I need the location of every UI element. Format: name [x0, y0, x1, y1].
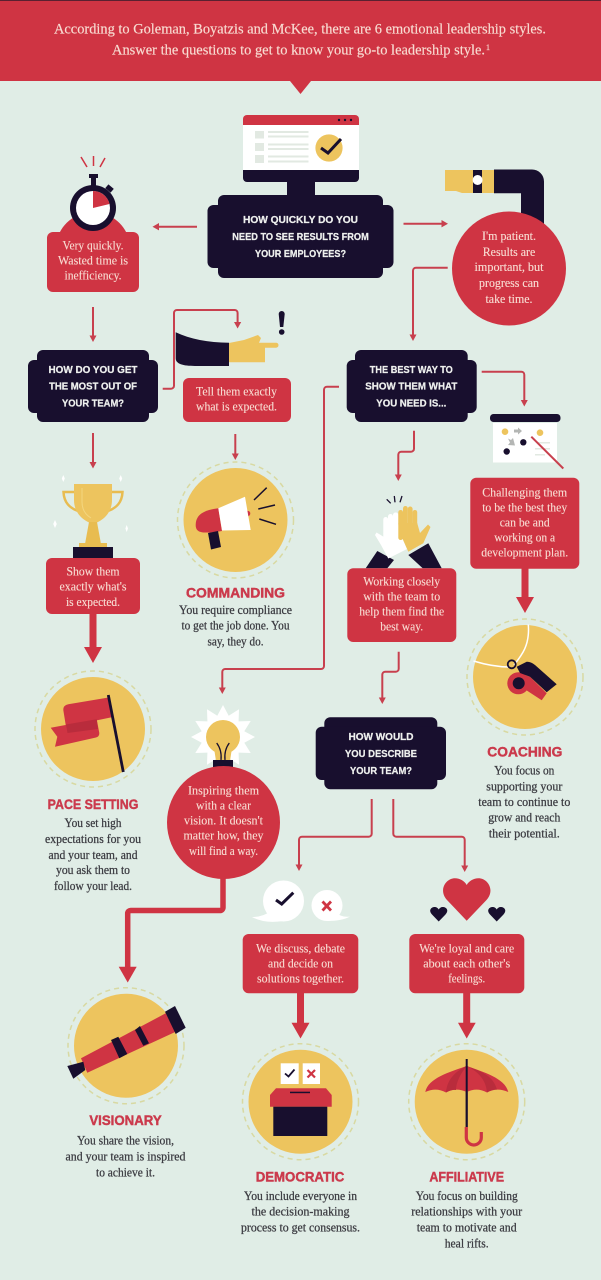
- answer box: working closely: help them find the: [359, 604, 445, 618]
- answer circle: inspiring: will find a way.: [189, 844, 258, 858]
- question: best way: YOU NEED IS...: [376, 399, 446, 410]
- answer box: challenging: development plan.: [481, 546, 568, 560]
- icon: arm with wristwatch: [445, 170, 544, 240]
- answer box: we're loyal: about each other's: [423, 956, 510, 970]
- answer circle: inspiring: [167, 766, 280, 879]
- question: describe team: [316, 717, 446, 789]
- text: pace setting: expectations for you: [45, 832, 141, 846]
- icon: hearts: [430, 878, 505, 922]
- answer circle: inspiring: with a clear: [196, 799, 251, 813]
- answer box: challenging: [470, 478, 579, 569]
- answer circle: inspiring: Inspiring them: [188, 784, 259, 798]
- arrow: best way to whiteboard: [482, 372, 528, 406]
- text: affiliative: team to motivate and: [417, 1221, 517, 1235]
- text: commanding: [179, 584, 293, 649]
- answer box: show them: [46, 558, 140, 614]
- text: democratic: the decision-making: [252, 1205, 350, 1219]
- question: how quickly: YOUR EMPLOYEES?: [255, 249, 346, 260]
- answer circle: patient: take time.: [486, 292, 532, 306]
- arrow: loyal to affiliative: [458, 992, 476, 1038]
- icon: stopwatch: [81, 156, 114, 193]
- answer box: tell them: Tell them exactly: [196, 385, 278, 399]
- question: how quickly: NEED TO SEE RESULTS FROM: [232, 232, 369, 243]
- text: coaching: team to continue to: [478, 795, 570, 809]
- arrow: patient to best way: [410, 268, 448, 341]
- answer box: show them: is expected.: [66, 595, 120, 609]
- answer circle: patient: important, but: [474, 260, 544, 274]
- arrow: describe team to discuss: [296, 799, 372, 871]
- question: best way: [347, 350, 477, 422]
- text: visionary: and your team is inspired: [66, 1149, 186, 1163]
- question: best way: SHOW THEM WHAT: [365, 382, 458, 393]
- icon: affiliative umbrella: [409, 1044, 525, 1160]
- text: visionary: [66, 1112, 186, 1179]
- arrow: very quickly to how do you get: [90, 307, 96, 342]
- text: visionary: VISIONARY: [89, 1112, 162, 1128]
- arrow: show them to pace setting: [84, 613, 102, 663]
- intro text: [54, 22, 546, 58]
- text: commanding: say, they do.: [208, 635, 264, 649]
- icon: pointing hand: [176, 332, 278, 366]
- text: democratic: process to get consensus.: [241, 1221, 360, 1235]
- icon: trophy: [53, 475, 128, 558]
- icon: visionary telescope: [67, 988, 186, 1104]
- answer circle: patient: I'm patient.: [482, 229, 536, 243]
- answer box: show them: Show them: [66, 565, 120, 579]
- text: visionary: to achieve it.: [96, 1165, 155, 1179]
- icon: high five: [366, 496, 442, 568]
- text: coaching: grow and reach: [488, 811, 560, 825]
- question: describe team: YOU DESCRIBE: [345, 749, 417, 760]
- icon: democratic ballot box: [242, 1044, 358, 1160]
- question: describe team: HOW WOULD: [348, 732, 414, 743]
- text: affiliative: You focus on building: [416, 1189, 518, 1203]
- text: democratic: [241, 1169, 360, 1235]
- answer box: very quickly: Wasted time is: [58, 254, 128, 268]
- icon: whiteboard: [490, 414, 563, 468]
- text: democratic: DEMOCRATIC: [256, 1169, 344, 1185]
- answer circle: patient: Results are: [483, 245, 536, 259]
- icon: computer monitor with check: [243, 115, 359, 197]
- text: democratic: You include everyone in: [244, 1189, 357, 1203]
- icon: speech bubbles: [252, 880, 350, 922]
- answer box: we're loyal: We're loyal and care: [419, 941, 515, 955]
- arrow: how do you get to tell them: [163, 310, 241, 389]
- intro text: According to Goleman, Boyatzis and McKee, there are 6 emotional leadership styles.: [54, 22, 546, 38]
- answer circle: patient: progress can: [479, 276, 539, 290]
- text: affiliative: relationships with your: [411, 1205, 522, 1219]
- arrow: to very quickly: [152, 223, 197, 230]
- answer box: challenging: Challenging them: [482, 486, 568, 500]
- icon: commanding megaphone: [178, 462, 294, 578]
- answer box: show them: exactly what's: [60, 580, 127, 594]
- icon: coaching whistle: [467, 619, 583, 735]
- question: how do you get: [28, 350, 158, 422]
- answer box: working closely: with the team to: [363, 589, 440, 603]
- text: affiliative: AFFILIATIVE: [429, 1169, 504, 1185]
- text: pace setting: you ask them to: [56, 863, 130, 877]
- arrow: inspiring to visionary: [119, 877, 223, 982]
- answer box: challenging: to be the best they: [482, 501, 568, 515]
- question: how do you get: HOW DO YOU GET: [48, 365, 138, 376]
- answer box: very quickly: Very quickly.: [62, 238, 124, 252]
- text: affiliative: [411, 1169, 522, 1250]
- arrow: tell them to commanding: [232, 434, 239, 460]
- intro text: 1: [486, 43, 490, 52]
- text: pace setting: [45, 796, 141, 893]
- question: describe team: YOUR TEAM?: [350, 766, 412, 777]
- icon: light bulb: [191, 705, 255, 769]
- arrow: describe team to loyal: [393, 799, 468, 872]
- answer circle: patient: [452, 212, 566, 326]
- answer circle: inspiring: vision. It doesn't: [184, 814, 264, 828]
- arrow: how do you get to trophy: [90, 433, 96, 468]
- answer box: very quickly: inefficiency.: [64, 268, 122, 282]
- text: pace setting: and your team, and: [48, 848, 138, 862]
- arrow: best way to high five: [395, 431, 414, 481]
- arrow: working closely to describe team: [379, 652, 399, 704]
- answer box: challenging: working on a: [494, 531, 556, 545]
- text: coaching: [478, 744, 570, 840]
- icon: exclamation mark: [279, 311, 285, 335]
- answer box: we're loyal: feelings.: [448, 971, 485, 985]
- question: how do you get: YOUR TEAM?: [62, 399, 124, 410]
- text: commanding: You require compliance: [179, 603, 293, 617]
- arrow: to patient: [404, 220, 448, 227]
- arrow: discuss to democratic: [292, 992, 310, 1038]
- text: commanding: COMMANDING: [186, 584, 285, 600]
- answer box: working closely: best way.: [380, 620, 423, 634]
- answer box: challenging: can be and: [500, 516, 550, 530]
- text: commanding: to get the job done. You: [182, 619, 290, 633]
- text: coaching: their potential.: [489, 826, 560, 840]
- icon: pace setting flag: [35, 671, 151, 787]
- header banner: [0, 0, 601, 94]
- answer box: very quickly: [47, 185, 139, 292]
- text: pace setting: You set high: [64, 816, 122, 830]
- text: pace setting: PACE SETTING: [48, 796, 138, 812]
- arrow: challenging to coaching: [516, 568, 534, 613]
- answer box: tell them: what is expected.: [196, 400, 277, 414]
- question: best way: THE BEST WAY TO: [370, 365, 453, 376]
- answer box: tell them: [183, 378, 291, 422]
- answer box: we discuss: and decide on: [268, 956, 333, 970]
- text: coaching: You focus on: [494, 763, 554, 777]
- answer box: we're loyal: [409, 934, 524, 993]
- answer box: working closely: [347, 568, 456, 642]
- question: how do you get: THE MOST OUT OF: [49, 382, 137, 393]
- answer box: we discuss: solutions together.: [257, 971, 344, 985]
- question: how quickly: HOW QUICKLY DO YOU: [243, 215, 358, 226]
- text: coaching: supporting your: [486, 779, 562, 793]
- answer circle: inspiring: matter how, they: [184, 829, 264, 843]
- text: pace setting: follow your lead.: [54, 879, 132, 893]
- answer box: we discuss: [243, 934, 358, 993]
- arrow: best way to visionary: [219, 387, 339, 694]
- question: how quickly: [208, 195, 394, 278]
- intro text: Answer the questions to get to know your go-to leadership style.: [112, 42, 485, 58]
- text: coaching: COACHING: [487, 744, 562, 760]
- answer box: we discuss: We discuss, debate: [256, 941, 346, 955]
- text: visionary: You share the vision,: [77, 1134, 174, 1148]
- answer box: working closely: Working closely: [363, 574, 441, 588]
- text: affiliative: heal rifts.: [445, 1236, 489, 1250]
